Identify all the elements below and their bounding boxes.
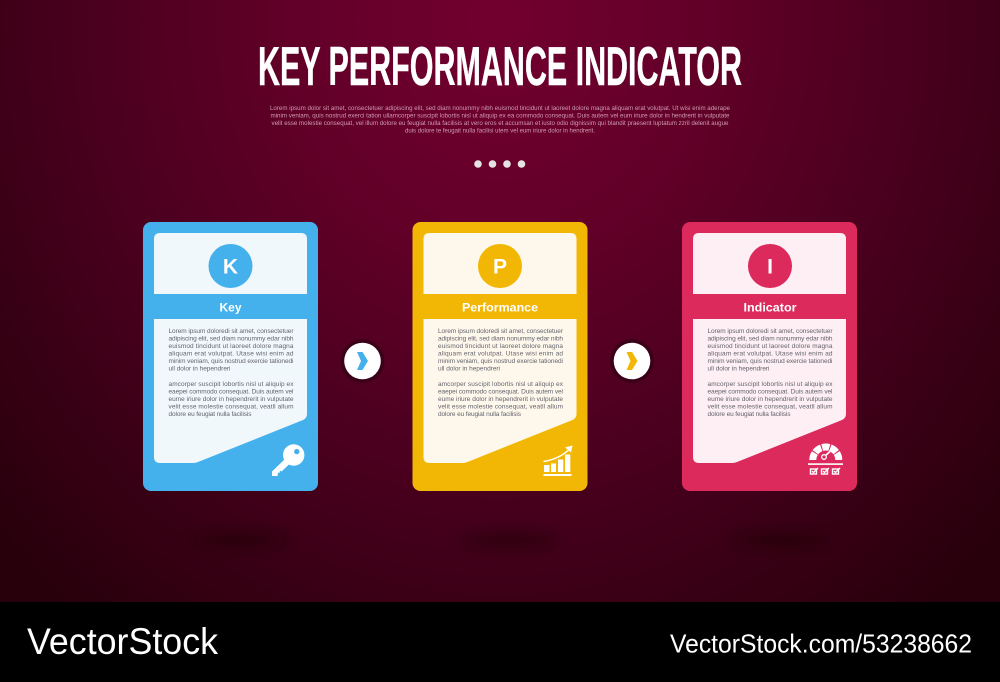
body panel [154, 319, 307, 463]
icon: growth chart [544, 446, 572, 476]
body text: dolore eu feugiat nulla facilisis [168, 411, 252, 418]
header panel [154, 233, 307, 294]
body text: minim veniam, quis nostrud exercie tationedi [708, 358, 832, 365]
body text: amcorper suscipit lobortis nisl ut aliquip ex [708, 381, 833, 388]
body text: velit esse molestie consequat, veatll allum [438, 404, 563, 410]
body text [708, 328, 833, 418]
panel: Key [143, 222, 318, 491]
body text: euismod tincidunt ut laoreet dolore magna [438, 343, 563, 350]
body text: aliquam erat volutpat. Utase wisi enim ad [168, 350, 294, 358]
body panel [424, 319, 576, 463]
icon: key [272, 444, 304, 476]
card background [143, 222, 318, 491]
card background [682, 222, 857, 491]
body text: eume iriure dolor in hependrerit in vulputate [168, 396, 294, 403]
body text: Lorem ipsum doloredi sit amet, consectetuer [168, 328, 294, 335]
intro text: Lorem ipsum dolor sit amet, consectetuer adipiscing elit, sed diam nonummy nibh euismod tincidunt ut laoreet dolore magna aliquam erat volutpat. Ut wisi enim aderape [270, 105, 731, 112]
body text: adipiscing elit, sed diam nonummy edar nibh [168, 336, 294, 342]
body text: eume iriure dolor in hependrerit in vulputate [708, 396, 833, 403]
body text [168, 328, 294, 418]
body text: minim veniam, quis nostrud exercie tationedi [438, 358, 563, 365]
footer image id: VectorStock.com/53238662 [670, 628, 972, 658]
footer logo: VectorStock [27, 621, 218, 662]
header panel [424, 233, 576, 294]
footer band [0, 602, 1000, 682]
body text: amcorper suscipit lobortis nisl ut aliquip ex [168, 381, 294, 388]
body text: eaepei commodo consequat. Duis autem vel [438, 388, 564, 396]
body text: aliquam erat volutpat. Utase wisi enim ad [708, 350, 833, 358]
body text: velit esse molestie consequat, veatll allum [168, 404, 294, 410]
heading: Performance: Performance [462, 300, 538, 314]
body text: amcorper suscipit lobortis nisl ut aliquip ex [438, 381, 564, 388]
arrow: Performance to Indicator [610, 339, 654, 383]
body text: dolore eu feugiat nulla facilisis [438, 411, 522, 418]
body text: ull dolor in hependreri [708, 366, 770, 372]
body text: adipiscing elit, sed diam nonummy edar nibh [708, 336, 833, 342]
panel: Performance [412, 222, 588, 491]
intro text [270, 105, 731, 134]
pagination dots [474, 160, 525, 168]
body text: eume iriure dolor in hependrerit in vulputate [438, 396, 563, 403]
card background [412, 222, 588, 491]
body text: Lorem ipsum doloredi sit amet, consectetuer [708, 328, 833, 335]
body text: adipiscing elit, sed diam nonummy edar nibh [438, 336, 563, 342]
heading: Indicator: Indicator [744, 300, 797, 314]
letter badge K [208, 244, 252, 288]
body text: dolore eu feugiat nulla facilisis [708, 411, 791, 418]
heading: Key: Key [219, 300, 242, 314]
body text: ull dolor in hependreri [168, 366, 230, 372]
header panel [693, 233, 846, 294]
letter badge I: I [767, 256, 773, 278]
body text: velit esse molestie consequat, veatll allum [708, 404, 832, 410]
panel: Indicator [682, 222, 857, 491]
letter badge P: P [493, 256, 507, 278]
card shadows [192, 534, 828, 546]
body text: ull dolor in hependreri [438, 366, 500, 372]
body text: Lorem ipsum doloredi sit amet, consectetuer [438, 328, 564, 335]
body text: euismod tincidunt ut laoreet dolore magna [708, 343, 833, 350]
body text: eaepei commodo consequat. Duis autem vel [168, 388, 294, 396]
body text: aliquam erat volutpat. Utase wisi enim ad [438, 350, 563, 358]
intro text: duis dolore te feugait nulla facilisi utem vel eum iriure dolor in hendrerit. [405, 128, 595, 134]
body text [438, 328, 564, 418]
arrow: Key to Performance [340, 339, 384, 383]
intro text: velit esse molestie consequat, vel illum dolore eu feugiat nulla facilisis at vero eros et accumsan et iusto odio dignissim qui blandit praesent luptatum zzril delenit augue [272, 120, 729, 127]
body panel [693, 319, 846, 463]
body text: eaepei commodo consequat. Duis autem vel [708, 388, 833, 396]
body text: euismod tincidunt ut laoreet dolore magna [168, 343, 294, 350]
letter badge I [748, 244, 792, 288]
letter badge P [478, 244, 522, 288]
letter badge K: K [223, 256, 238, 278]
intro text: minim veniam, quis nostrud exerci tation ullamcorper suscipit lobortis nisl ut aliquip ex ea commodo consequat. Duis autem vel eum iriure dolor in hendrerit in vulputate [270, 112, 730, 120]
body text: minim veniam, quis nostrud exercie tationedi [168, 358, 294, 365]
icon: gauge with checkboxes [808, 447, 843, 474]
